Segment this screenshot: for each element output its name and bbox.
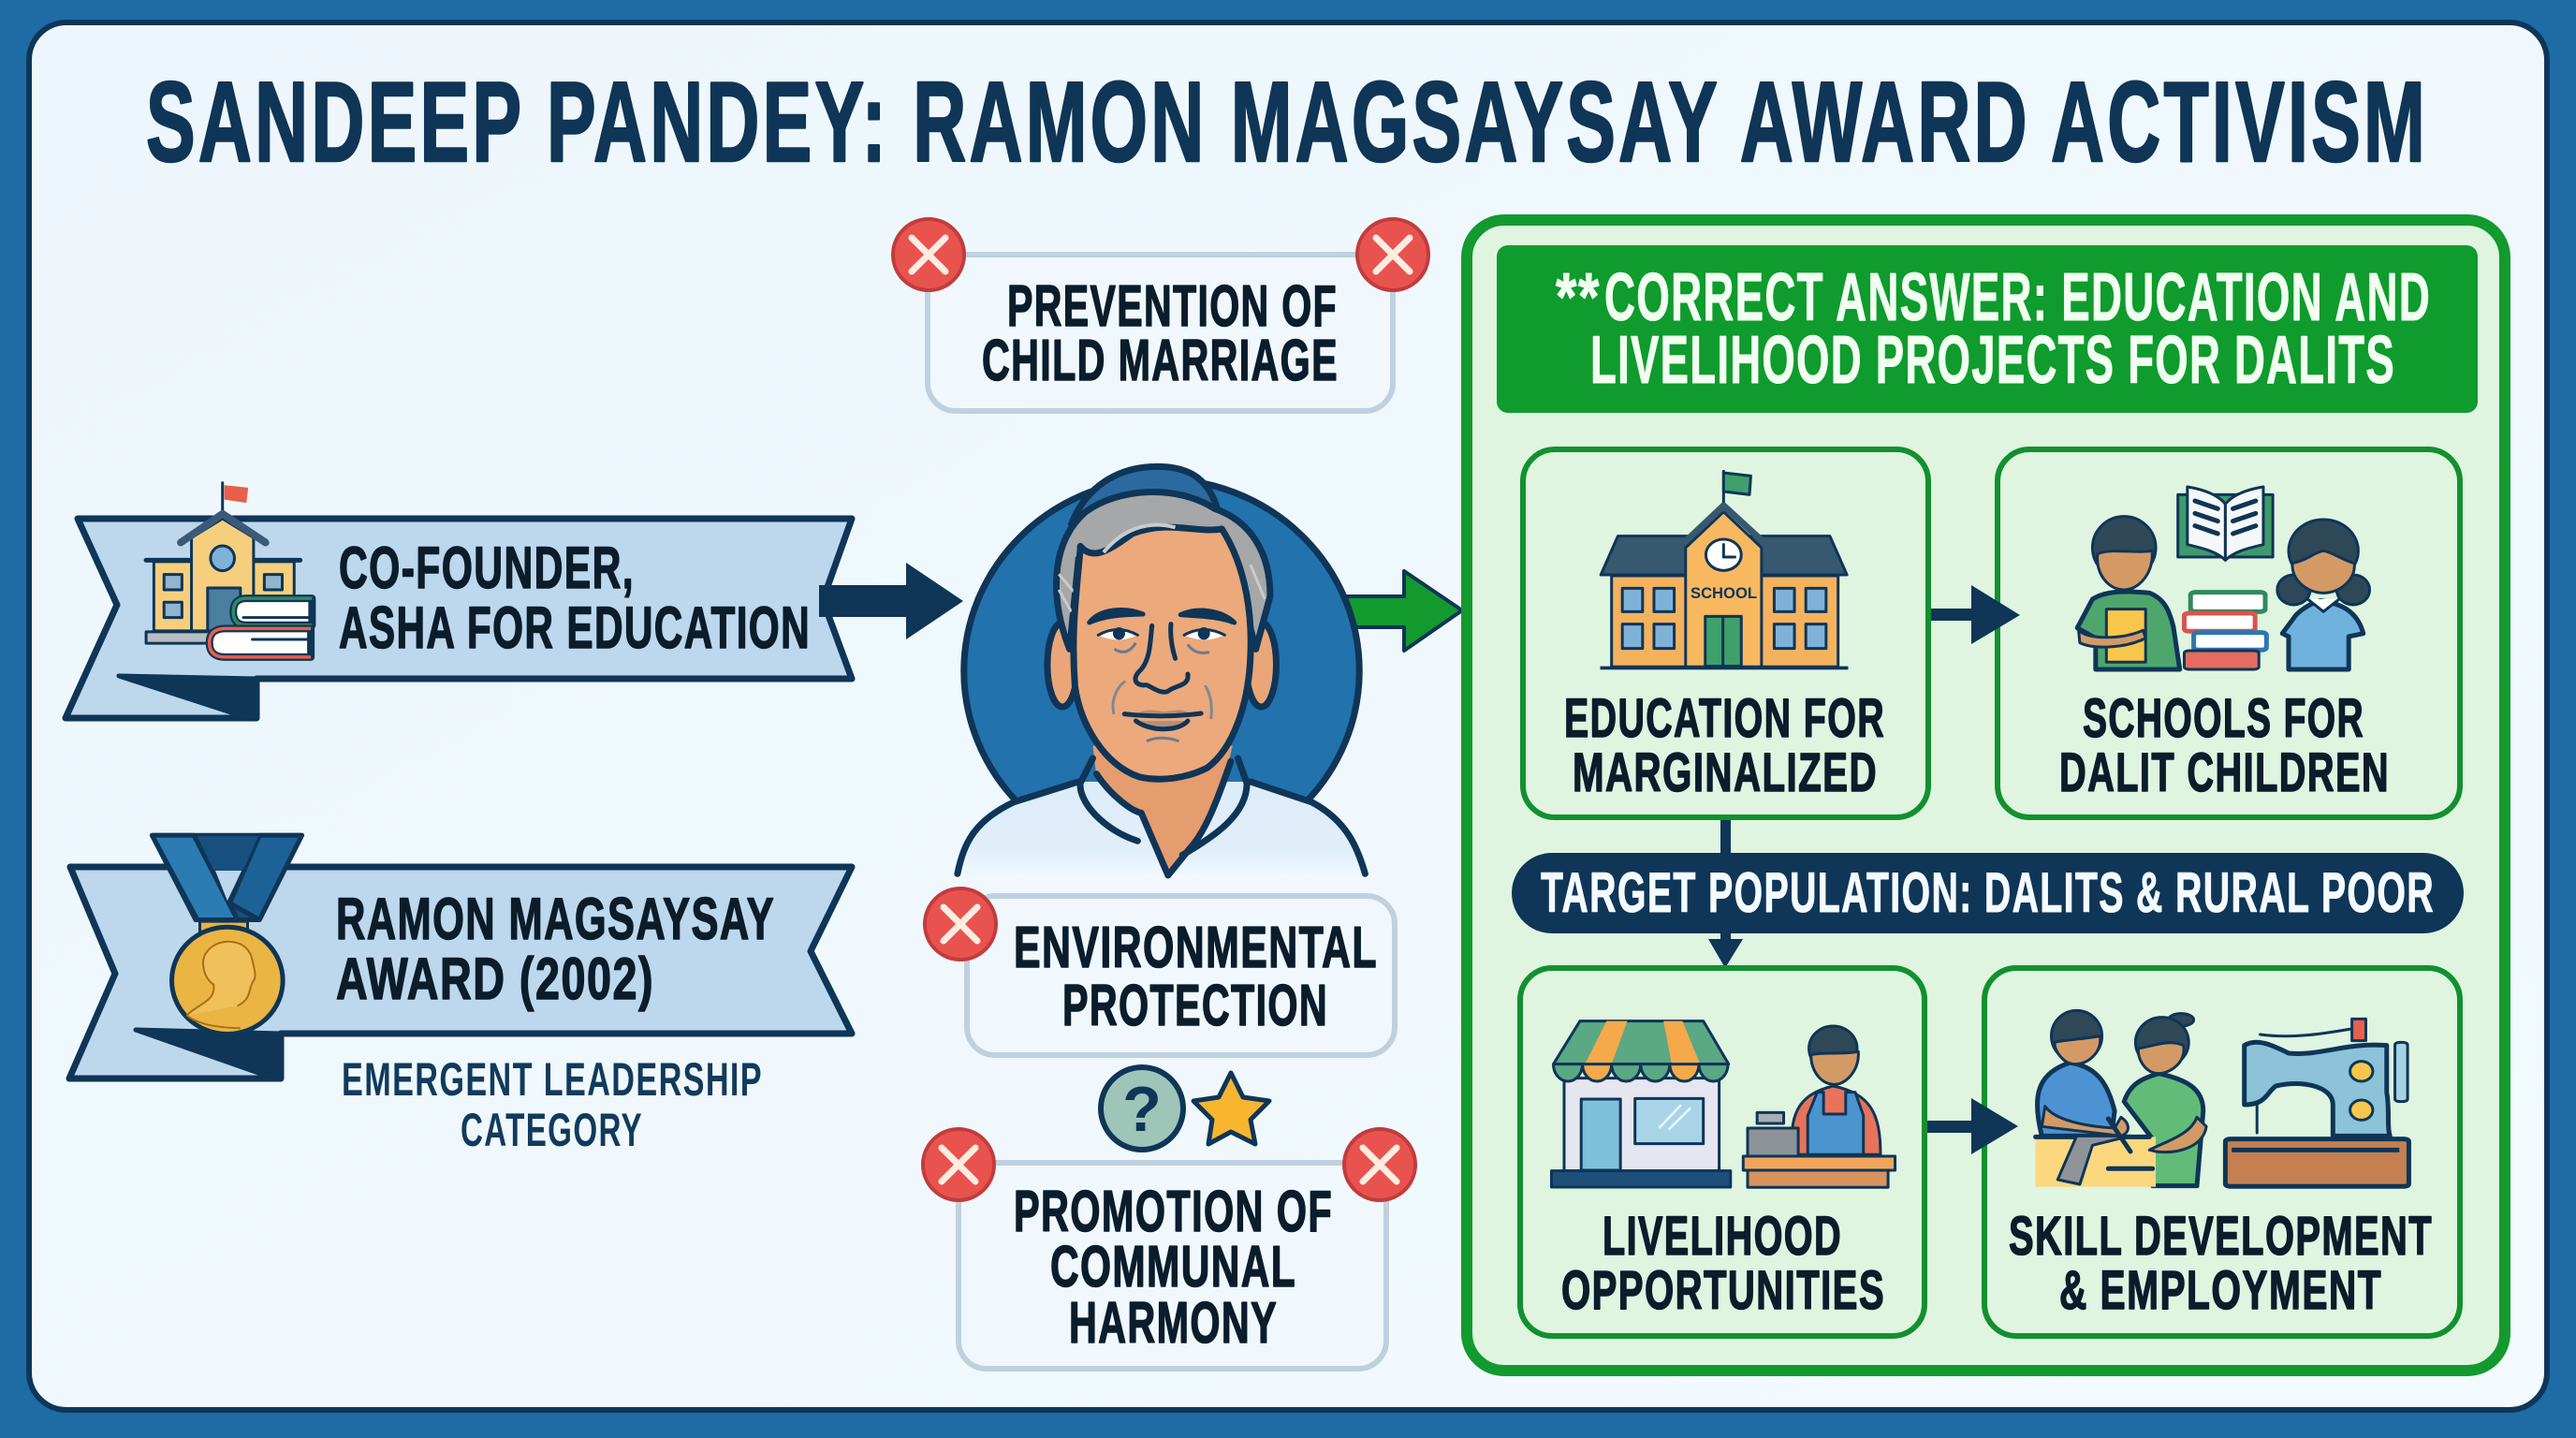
icon: red cross left: [923, 1129, 994, 1200]
arrow: person to answer (green): [1344, 571, 1462, 651]
card label: MARGINALIZED: [1573, 742, 1878, 803]
arrow: target to livelihood: [1708, 933, 1743, 968]
card: skill development: [1984, 968, 2460, 1336]
card: schools for dalit children: [1998, 449, 2460, 817]
option: promotion of communal harmony: HARMONY: [1069, 1291, 1278, 1356]
card label: [2059, 688, 2390, 803]
answer header: **: [1556, 260, 1601, 335]
arrow: livelihood to skill: [1927, 1098, 2018, 1154]
card label: DALIT CHILDREN: [2059, 742, 2390, 803]
icon: school and books: [146, 483, 312, 657]
icon: medal: [152, 835, 302, 1034]
caption: category: [342, 1053, 763, 1156]
icon: red cross right: [1357, 219, 1428, 290]
card label: EDUCATION FOR: [1564, 688, 1885, 749]
ribbon label: [336, 887, 775, 1012]
ribbon label: ASHA FOR EDUCATION: [339, 595, 811, 661]
card label: LIVELIHOOD: [1603, 1206, 1842, 1267]
card label: OPPORTUNITIES: [1561, 1260, 1885, 1321]
ribbon label: AWARD (2002): [336, 946, 654, 1012]
option: prevention of child marriage: CHILD MARRIAGE: [982, 329, 1339, 393]
connector: education to target: [1720, 817, 1731, 855]
pill: target population: [1512, 853, 2464, 933]
card label: & EMPLOYMENT: [2059, 1260, 2382, 1321]
icon: children with books: [2077, 487, 2370, 669]
option: environmental protection: [925, 888, 1395, 1055]
icon: question mark: ?: [1122, 1074, 1162, 1145]
option: promotion of communal harmony: PROMOTION OF: [1014, 1180, 1333, 1244]
ribbon: co-founder: [66, 483, 852, 718]
icon: shop and shopkeeper: [1551, 1021, 1895, 1187]
arrow: co-founder to person: [819, 563, 963, 639]
card label: [1561, 1206, 1885, 1321]
school sign: SCHOOL: [1690, 584, 1757, 602]
panel: correct answer: [1467, 220, 2505, 1371]
ribbon: magsaysay award: [69, 835, 852, 1078]
icon: red cross: [925, 888, 996, 960]
icon: red cross right: [1344, 1129, 1415, 1200]
option: prevention of child marriage: PREVENTION OF: [1007, 274, 1338, 339]
card label: SCHOOLS FOR: [2083, 688, 2364, 749]
ribbon label: RAMON MAGSAYSAY: [336, 887, 775, 952]
option: prevention of child marriage: [893, 219, 1428, 411]
portrait: Sandeep Pandey: [958, 466, 1365, 875]
icon: school building: [1601, 471, 1849, 669]
answer header: [1497, 245, 2478, 413]
option: promotion of communal harmony: [923, 1129, 1415, 1369]
card label: [2009, 1206, 2433, 1321]
ribbon label: [339, 536, 811, 661]
card label: [1564, 688, 1885, 803]
icon: workers and sewing machine: [2036, 1010, 2408, 1187]
option: environmental protection: PROTECTION: [1062, 974, 1328, 1038]
option: promotion of communal harmony: COMMUNAL: [1050, 1235, 1296, 1299]
arrow: education to schools: [1931, 585, 2020, 644]
card: livelihood opportunities: [1520, 968, 1925, 1336]
icon: question mark: [1101, 1067, 1183, 1150]
option: environmental protection: ENVIRONMENTAL: [1014, 916, 1378, 980]
caption: category: EMERGENT LEADERSHIP: [342, 1053, 763, 1106]
icon: red cross left: [893, 219, 964, 290]
icon: star: [1193, 1073, 1269, 1144]
ribbon label: CO-FOUNDER,: [339, 536, 635, 601]
card: education for marginalized: [1523, 449, 1928, 817]
caption: category: CATEGORY: [461, 1104, 643, 1156]
